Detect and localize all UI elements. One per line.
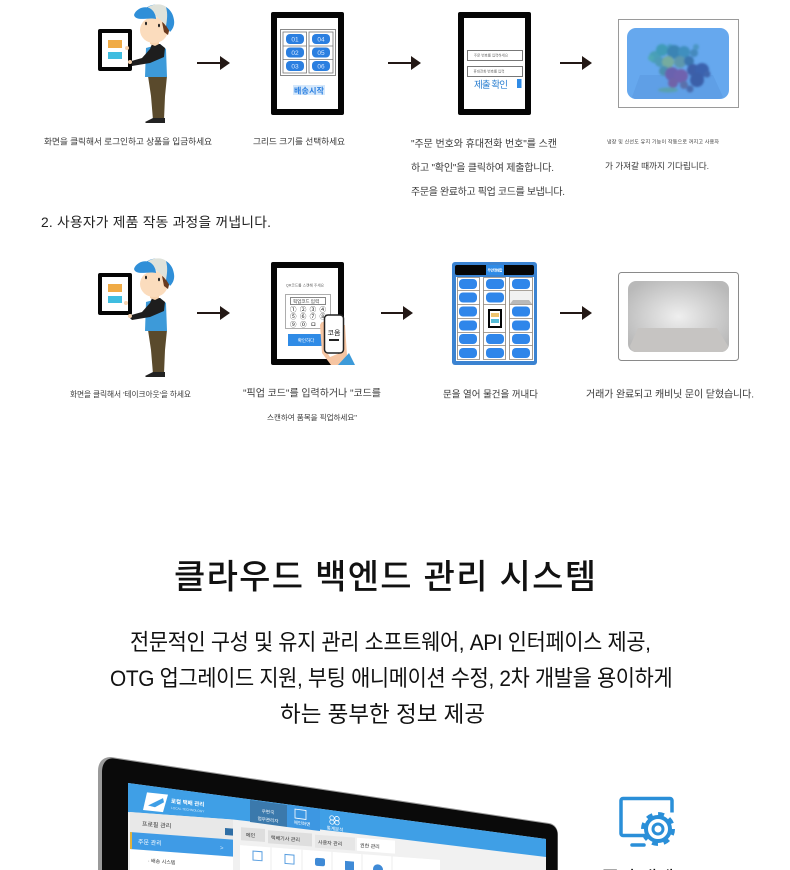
software panels — [130, 812, 440, 870]
produce — [648, 44, 710, 92]
step 1-2: grid selection tablet — [271, 12, 344, 115]
top tabs: 업무관리자 — [258, 815, 279, 825]
step 2-4: closed cabinet — [618, 272, 738, 360]
sidebar — [130, 812, 233, 870]
caption 1-3 — [411, 138, 565, 198]
confirm button: 확인하다 — [298, 337, 315, 344]
tablet — [98, 29, 132, 71]
locker grid: 03 — [291, 64, 299, 70]
header bar — [128, 783, 546, 857]
arrow — [388, 56, 421, 70]
caption 2-2 — [243, 386, 381, 422]
worker figure — [128, 258, 174, 377]
caption 1-4 — [605, 138, 719, 171]
toolbar — [240, 845, 440, 870]
caption 1-2: 그리드 크기를 선택하세요 — [253, 136, 345, 146]
top tabs — [250, 800, 343, 833]
caption 2-1: 화면을 클릭해서 '테이크아웃'을 하세요 — [70, 389, 191, 399]
description paragraph: 하는 풍부한 정보 제공 — [280, 702, 485, 727]
keypad: ①②③④ — [290, 306, 326, 314]
top tabs: 우편국 — [262, 808, 274, 816]
locker grid — [280, 30, 336, 76]
caption 1-3: "주문 번호와 휴대전화 번호"를 스캔 — [411, 138, 557, 150]
screen background — [128, 783, 546, 870]
step 2-2: pickup code tablet with phone — [271, 262, 355, 365]
description paragraph — [110, 629, 673, 727]
description paragraph: 전문적인 구성 및 유지 관리 소프트웨어, API 인터페이스 제공, — [130, 629, 651, 655]
sidebar: 프로필 관리 — [142, 820, 171, 830]
icon: monitor with gear — [621, 798, 673, 845]
tablet — [98, 273, 132, 318]
top tabs: 메인화면 — [294, 819, 310, 828]
start button: 배송시작 — [294, 86, 325, 96]
caption 1-3: 주문을 완료하고 픽업 코드를 보냅니다. — [411, 185, 565, 198]
content tabs: 사용자 관리 — [318, 839, 342, 848]
content tabs — [241, 827, 395, 854]
logo: 로컬 택배 관리 — [171, 797, 204, 808]
description paragraph: OTG 업그레이드 지원, 부팅 애니메이션 수정, 2차 개발을 용이하게 — [110, 665, 673, 691]
step 2-2: pickup code tablet with phone: QR코드를 스캔해 주세요 — [286, 282, 325, 288]
step 1-1: worker with tablet — [98, 4, 174, 123]
locker grid: 02 — [291, 50, 299, 57]
top tabs: 통계분석 — [327, 824, 343, 833]
arrow — [560, 306, 592, 320]
arrow — [381, 306, 413, 320]
step 2-3: locker cabinet: 무인택배함 — [488, 268, 503, 272]
open door — [510, 291, 532, 304]
logo — [143, 792, 205, 817]
keypad: ⑨⓪ㅁㄴ — [290, 320, 326, 328]
worker figure — [128, 4, 174, 123]
locker grid: 01 — [291, 36, 299, 44]
locker screen — [488, 309, 502, 328]
keypad: 픽업코드 입력 — [293, 298, 319, 305]
arrow — [197, 306, 230, 320]
content tabs: 택배기사 관리 — [271, 834, 300, 844]
caption 2-3: 문을 열어 물건을 꺼내다 — [443, 390, 538, 400]
locker grid: 04 — [317, 36, 325, 44]
step 1-3: submit confirm tablet: 제출 확인 — [474, 79, 508, 91]
sidebar: · 배송 시스템 — [148, 857, 176, 866]
keypad — [286, 294, 330, 328]
arrow — [197, 56, 230, 70]
content tabs: 메인 — [246, 832, 256, 839]
content tabs: 권한 관리 — [360, 842, 380, 850]
step 2-1: worker with tablet — [98, 258, 174, 377]
caption 2-2: "픽업 코드"를 입력하거나 "코드를 — [243, 386, 381, 400]
caption 1-4: 가 가져갈 때까지 기다립니다. — [605, 161, 709, 171]
caption 1-3: 하고 "확인"을 클릭하여 제출합니다. — [411, 161, 554, 174]
monitor with admin software — [98, 757, 558, 870]
step 1-4: cabinet with produce — [618, 20, 738, 108]
logo: LOCAL TECHNOLOGY — [171, 806, 205, 814]
caption 2-4: 거래가 완료되고 캐비닛 문이 닫혔습니다. — [586, 388, 754, 400]
main title: 클라우드 백엔드 관리 시스템 — [174, 558, 596, 596]
arrow — [560, 56, 592, 70]
caption 1-4: 냉장 및 신선도 유지 기능이 작동으로 꺼지고 사용자 — [607, 138, 719, 146]
section heading 2: 2. 사용자가 제품 작동 과정을 꺼냅니다. — [41, 215, 271, 230]
locker grid: 06 — [317, 64, 325, 70]
caption 1-1: 화면을 클릭해서 로그인하고 상품을 입금하세요 — [44, 136, 212, 146]
caption 2-2: 스캔하여 품목을 픽업하세요" — [267, 412, 357, 422]
step 1-3: submit confirm tablet: 주문 번호를 입력하세요 — [474, 52, 509, 58]
sidebar: > — [220, 846, 224, 852]
step 1-3: submit confirm tablet — [458, 12, 531, 115]
bezel — [98, 757, 558, 870]
step 1-3: submit confirm tablet: 휴대전화 번호를 입력 — [474, 68, 504, 74]
sidebar: 주문 관리 — [138, 838, 162, 847]
step 2-3: locker cabinet — [452, 262, 537, 365]
locker doors — [459, 279, 530, 358]
keypad: ⑤⑥⑦⑧ — [290, 312, 326, 320]
locker grid: 05 — [317, 50, 325, 57]
hand holding phone: 코옴 — [328, 329, 341, 337]
